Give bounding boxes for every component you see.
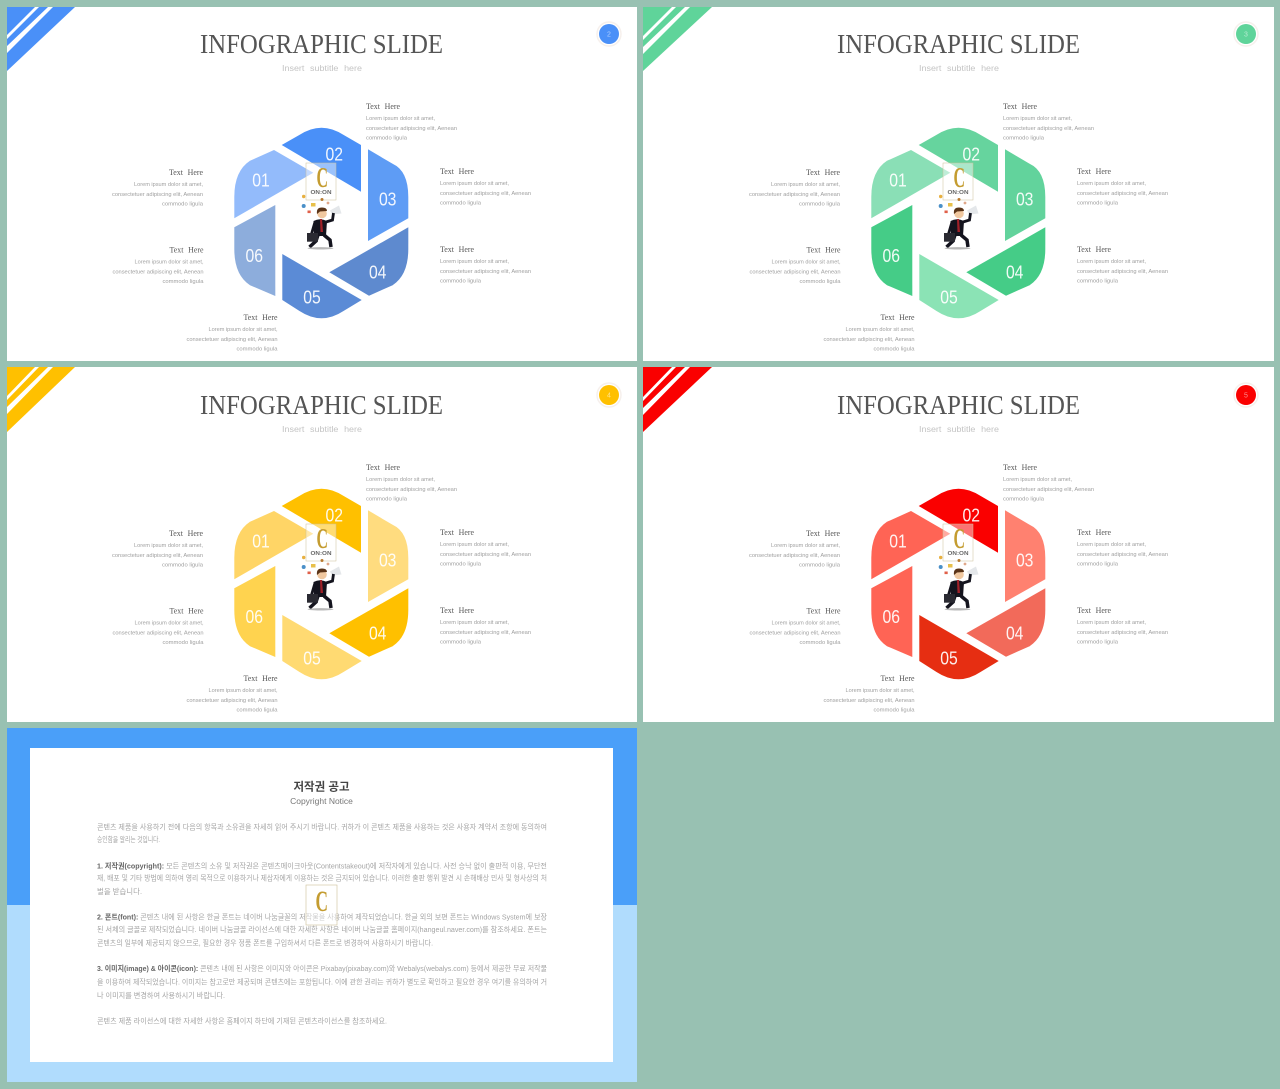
segment 03: 03	[379, 190, 396, 210]
text block bottom: consectetuer adipiscing elit, Aenean	[824, 337, 914, 343]
text block left lower: commodo ligula	[800, 640, 840, 646]
text block top: Text Here	[366, 101, 400, 111]
page badge: 5	[1244, 392, 1248, 400]
text block right upper: Text Here	[1077, 166, 1111, 176]
page badge: 2	[607, 32, 611, 38]
hexagon cycle diagram	[234, 489, 408, 679]
text block bottom: Text Here	[880, 673, 915, 683]
text block top	[1003, 101, 1094, 142]
text block right lower: commodo ligula	[1077, 640, 1118, 646]
text block: clause 3 image and icon: 을 이용하여 제작되었습니다. 이미지는 참고로만 제공되며 콘텐츠에는 포함됩니다. 이에 관한 권리는 귀하가 별도로 확인하고 필요한 경우 여기를 유의하여 거	[97, 976, 547, 986]
hexagon cycle diagram	[234, 128, 408, 318]
segment 01	[234, 150, 313, 218]
text block bottom: commodo ligula	[236, 708, 278, 714]
text block: clause 3 image and icon: 3. 이미지(image) & 아이콘(icon): 콘텐츠 내에 된 사항은 이미지와 아이콘은 Pixabay(pixabay.com)와 Webalys(webalys.com) 등에서 제공한 무료 저작물	[97, 963, 547, 973]
text block right upper: Lorem ipsum dolor sit amet,	[1077, 542, 1147, 548]
text block right upper: commodo ligula	[440, 200, 481, 206]
text block right lower: Lorem ipsum dolor sit amet,	[440, 259, 510, 265]
text block left lower: Lorem ipsum dolor sit amet,	[772, 260, 841, 266]
text block right upper: Text Here	[1077, 527, 1111, 537]
text block right upper: consectetuer adipiscing elit, Aenean	[1077, 552, 1168, 558]
text block right upper	[1077, 527, 1168, 568]
text block right lower: Text Here	[440, 605, 474, 615]
text block left lower: commodo ligula	[162, 279, 204, 285]
title: INFOGRAPHIC SLIDE	[200, 29, 443, 59]
text block bottom: Lorem ipsum dolor sit amet,	[208, 688, 278, 694]
icon: logo and businessman with megaphone: ON:ON	[948, 190, 969, 196]
segment 04: 04	[1006, 262, 1023, 282]
text block right upper: commodo ligula	[440, 562, 481, 568]
text block: clause 1 copyright: 1. 저작권(copyright): 모든 콘텐츠의 소유 및 저작권은 콘텐츠메이크아웃(Contentstakeout)에 저작자에게 있습니다. 사전 승낙 없이 출판적 이용, 무단전	[97, 860, 547, 870]
segment 06	[234, 566, 275, 657]
segment 05: 05	[940, 648, 958, 668]
text block right lower: commodo ligula	[1077, 278, 1118, 284]
text block left upper: consectetuer adipiscing elit, Aenean	[112, 553, 203, 559]
title: INFOGRAPHIC SLIDE	[837, 390, 1080, 420]
segment 01: 01	[889, 531, 907, 551]
segment 01: 01	[252, 531, 270, 551]
segment 05	[282, 254, 362, 318]
segment 01	[871, 150, 950, 218]
icon: logo and businessman with megaphone: C	[954, 163, 965, 194]
icon: watermark logo: C	[316, 885, 328, 918]
text block right upper: consectetuer adipiscing elit, Aenean	[1077, 191, 1168, 197]
text block right lower: consectetuer adipiscing elit, Aenean	[440, 269, 531, 275]
text block bottom: Text Here	[880, 312, 915, 322]
text block: intro: 콘텐츠 제품을 사용하기 전에 다음의 항목과 소유권을 자세히 읽어 주시기 바랍니다. 귀하가 이 콘텐츠 제품을 사용하는 것은 사용자 계약서 조항에 동의하여	[97, 822, 547, 832]
segment 05: 05	[303, 648, 321, 668]
text block left lower: consectetuer adipiscing elit, Aenean	[112, 630, 204, 636]
text block bottom: commodo ligula	[874, 346, 914, 352]
text block right upper: Lorem ipsum dolor sit amet,	[440, 181, 510, 187]
text block left lower: Lorem ipsum dolor sit amet,	[772, 620, 841, 626]
title: INFOGRAPHIC SLIDE	[200, 390, 443, 420]
segment 05	[919, 615, 999, 679]
text block top: Lorem ipsum dolor sit amet,	[1003, 477, 1073, 483]
segment 04	[329, 227, 408, 296]
text block left lower: consectetuer adipiscing elit, Aenean	[750, 270, 840, 276]
text block right lower	[440, 605, 531, 646]
text block left lower: commodo ligula	[162, 640, 204, 646]
subtitle: Insert subtitle here	[282, 63, 362, 73]
segment 06: 06	[246, 246, 263, 266]
text block left lower	[750, 244, 841, 285]
subtitle: Insert subtitle here	[919, 424, 999, 434]
corner ribbon	[7, 7, 75, 71]
subtitle: Insert subtitle here	[282, 424, 362, 434]
segment 05	[919, 254, 999, 318]
text block right lower: Text Here	[440, 244, 474, 254]
text block right upper: commodo ligula	[1077, 562, 1118, 568]
segment 04: 04	[369, 262, 386, 282]
text block: clause 2 font: 콘텐츠의 일부에 제공되지 않으므로, 필요한 경우 정품 폰트를 구입하셔서 다른 폰트로 변경하여 사용하시기 바랍니다.	[97, 938, 433, 948]
text block top: Text Here	[366, 462, 400, 472]
hexagon cycle diagram	[871, 489, 1045, 679]
text block top: Lorem ipsum dolor sit amet,	[366, 477, 436, 483]
text block: intro: 승인함을 알리는 것입니다.	[97, 834, 160, 844]
segment 01	[871, 511, 950, 579]
panel: red infographic slide	[643, 367, 1274, 722]
icon: logo and businessman with megaphone: C	[316, 524, 328, 555]
text block right lower: commodo ligula	[440, 278, 481, 284]
text block top: commodo ligula	[1003, 496, 1044, 502]
text block right upper	[440, 527, 531, 568]
text block left upper: Lorem ipsum dolor sit amet,	[771, 182, 841, 188]
segment 04	[329, 588, 408, 657]
segment 02	[919, 128, 998, 192]
text block: clause 2 font	[97, 912, 547, 948]
text block top: commodo ligula	[366, 496, 407, 502]
corner ribbon	[643, 367, 712, 432]
icon: logo and businessman with megaphone: C	[316, 163, 328, 194]
text block: clause 3 image and icon: 나 이미지를 변경하여 사용하시기 바랍니다.	[97, 990, 225, 1000]
text block bottom	[186, 673, 278, 714]
text block: clause 1 copyright: 재, 배포 및 기타 방법에 의하여 영리 목적으로 이용하거나 제삼자에게 이용하는 것은 금지되어 있습니다. 이러한 출판 행위 발견 시 손해배상 민사 및 형사상의 처	[97, 872, 547, 882]
text block left upper: Text Here	[169, 528, 203, 538]
panel: green infographic slide	[643, 7, 1274, 361]
text block top	[1003, 462, 1094, 502]
text block left upper: consectetuer adipiscing elit, Aenean	[749, 192, 840, 198]
text block left upper: commodo ligula	[162, 202, 203, 208]
segment 02	[282, 128, 361, 192]
page badge	[597, 22, 621, 46]
text block right lower: commodo ligula	[440, 640, 481, 646]
text block top: commodo ligula	[1003, 136, 1044, 142]
text block right upper: Text Here	[440, 166, 474, 176]
text block left lower: Lorem ipsum dolor sit amet,	[134, 260, 204, 266]
segment 03	[368, 510, 408, 602]
segment 02: 02	[963, 505, 980, 525]
text block left lower: Lorem ipsum dolor sit amet,	[134, 620, 204, 626]
text block right upper: consectetuer adipiscing elit, Aenean	[440, 191, 531, 197]
text block left upper	[749, 167, 841, 208]
text block right lower: consectetuer adipiscing elit, Aenean	[440, 630, 531, 636]
text block right upper	[1077, 166, 1168, 206]
title: INFOGRAPHIC SLIDE	[837, 29, 1080, 59]
text block left lower: commodo ligula	[800, 279, 840, 285]
segment 06	[871, 205, 912, 296]
segment 05: 05	[303, 288, 321, 308]
text block: intro	[97, 822, 547, 844]
text block left upper: Text Here	[806, 528, 840, 538]
text block top: Lorem ipsum dolor sit amet,	[1003, 116, 1073, 122]
text block right lower: Lorem ipsum dolor sit amet,	[1077, 620, 1147, 626]
text block bottom: Text Here	[244, 673, 278, 683]
corner ribbon	[7, 367, 75, 432]
segment 03	[1005, 149, 1045, 241]
text block left upper: Text Here	[806, 167, 840, 177]
segment 03: 03	[1016, 190, 1033, 210]
text block bottom: commodo ligula	[874, 708, 914, 714]
text block left lower: Text Here	[170, 244, 204, 254]
page badge	[1234, 22, 1258, 46]
text block top: Text Here	[1003, 462, 1037, 472]
subheading: Copyright Notice	[290, 796, 353, 806]
icon: logo and businessman with megaphone: ON:ON	[310, 190, 332, 196]
text block left upper	[112, 167, 204, 208]
text block left upper: commodo ligula	[799, 562, 840, 568]
segment 06: 06	[883, 246, 900, 266]
text block bottom: consectetuer adipiscing elit, Aenean	[186, 337, 278, 343]
text block: clause 2 font: 된 서체의 글꼴로 제작되었습니다. 네이버 나눔글꼴 라이선스에 대한 자세한 사항은 네이버 나눔글꼴 홈페이지(hangeul.naver.com)를 참조하세요. 폰트는	[97, 924, 547, 934]
icon: logo and businessman with megaphone	[302, 163, 342, 250]
text block right lower	[1077, 244, 1168, 284]
segment 01: 01	[889, 170, 907, 190]
hexagon cycle diagram	[871, 128, 1045, 318]
segment 04	[966, 227, 1045, 296]
segment 05	[282, 615, 362, 679]
text block left lower: Text Here	[806, 606, 841, 616]
text block right lower: Lorem ipsum dolor sit amet,	[440, 620, 510, 626]
text block top: consectetuer adipiscing elit, Aenean	[366, 487, 457, 493]
segment 06: 06	[246, 607, 263, 627]
segment 02	[282, 489, 361, 553]
text block right lower: consectetuer adipiscing elit, Aenean	[1077, 269, 1168, 275]
icon: logo and businessman with megaphone	[302, 524, 342, 610]
text block left lower: consectetuer adipiscing elit, Aenean	[750, 630, 840, 636]
page badge: 3	[1244, 32, 1248, 38]
icon: watermark logo	[306, 885, 337, 925]
text block bottom	[186, 312, 278, 352]
text block right upper: Lorem ipsum dolor sit amet,	[440, 542, 510, 548]
segment 03	[368, 149, 408, 241]
segment 03: 03	[1016, 550, 1033, 570]
panel: yellow infographic slide	[7, 367, 637, 722]
text block left upper: Lorem ipsum dolor sit amet,	[771, 543, 841, 549]
segment 02: 02	[326, 144, 343, 164]
text block top	[366, 462, 457, 502]
page badge	[1234, 383, 1258, 407]
text block left lower: consectetuer adipiscing elit, Aenean	[112, 270, 204, 276]
segment 03	[1005, 510, 1045, 602]
panel: copyright notice	[7, 728, 637, 1082]
text block right upper: Text Here	[440, 527, 474, 537]
text block bottom	[824, 673, 915, 714]
panel: blue infographic slide	[7, 7, 637, 361]
text block top: Text Here	[1003, 101, 1037, 111]
segment 03: 03	[379, 550, 396, 570]
segment 06	[871, 566, 912, 657]
icon: logo and businessman with megaphone	[939, 524, 978, 610]
segment 02	[919, 489, 998, 553]
text block right lower: Text Here	[1077, 244, 1111, 254]
text block left upper: Lorem ipsum dolor sit amet,	[134, 182, 204, 188]
text block top: consectetuer adipiscing elit, Aenean	[366, 126, 457, 132]
text block top: commodo ligula	[366, 136, 407, 142]
text block bottom: Text Here	[244, 312, 278, 322]
segment 02: 02	[326, 505, 343, 525]
text block right lower: Lorem ipsum dolor sit amet,	[1077, 259, 1147, 265]
segment 04: 04	[369, 623, 386, 643]
subtitle: Insert subtitle here	[919, 63, 999, 73]
text block bottom: consectetuer adipiscing elit, Aenean	[186, 698, 278, 704]
text block right lower: consectetuer adipiscing elit, Aenean	[1077, 630, 1168, 636]
text block right upper: consectetuer adipiscing elit, Aenean	[440, 552, 531, 558]
text block bottom: consectetuer adipiscing elit, Aenean	[824, 698, 914, 704]
segment 05: 05	[940, 288, 958, 308]
text block left lower	[750, 606, 841, 646]
segment 01: 01	[252, 170, 270, 190]
icon: logo and businessman with megaphone: ON:ON	[310, 551, 332, 557]
text block right lower: Text Here	[1077, 605, 1111, 615]
text block bottom: commodo ligula	[236, 346, 278, 352]
segment 01	[234, 511, 313, 579]
text block bottom: Lorem ipsum dolor sit amet,	[846, 688, 915, 694]
corner ribbon	[643, 7, 712, 71]
text block left lower: Text Here	[806, 244, 841, 254]
text block right upper: commodo ligula	[1077, 200, 1118, 206]
text block right upper: Lorem ipsum dolor sit amet,	[1077, 181, 1147, 187]
text block: clause 1 copyright	[97, 860, 547, 896]
text block left lower: Text Here	[170, 606, 204, 616]
text block bottom	[824, 312, 915, 352]
text block: clause 2 font: 2. 폰트(font): 콘텐츠 내에 된 사항은 한글 폰트는 네이버 나눔글꼴의 저작물을 사용하여 제작되었습니다. 한글 외의 보편 폰트는 Windows System에 보장	[97, 912, 547, 922]
icon: logo and businessman with megaphone: C	[954, 524, 965, 555]
text block right lower	[1077, 605, 1168, 646]
text block left lower	[112, 606, 204, 646]
segment 06	[234, 205, 275, 296]
text block top: consectetuer adipiscing elit, Aenean	[1003, 126, 1094, 132]
text block left upper: consectetuer adipiscing elit, Aenean	[749, 553, 840, 559]
text block bottom: Lorem ipsum dolor sit amet,	[846, 327, 915, 333]
text block right lower	[440, 244, 531, 284]
text block left upper: Lorem ipsum dolor sit amet,	[134, 543, 204, 549]
icon: logo and businessman with megaphone: ON:ON	[948, 551, 969, 557]
heading: copyright notice: 저작권 공고	[293, 780, 350, 794]
segment 02: 02	[963, 144, 980, 164]
text block left upper: consectetuer adipiscing elit, Aenean	[112, 192, 203, 198]
text block left lower	[112, 244, 204, 285]
segment 04: 04	[1006, 623, 1023, 643]
text block: clause 1 copyright: 벌을 받습니다.	[97, 886, 142, 896]
text block right upper	[440, 166, 531, 206]
text block bottom: Lorem ipsum dolor sit amet,	[208, 327, 278, 333]
text block left upper: Text Here	[169, 167, 203, 177]
text block left upper: commodo ligula	[799, 202, 840, 208]
text block top	[366, 101, 457, 142]
text block left upper	[112, 528, 204, 568]
text block top: consectetuer adipiscing elit, Aenean	[1003, 487, 1094, 493]
page badge	[597, 383, 621, 407]
text block top: Lorem ipsum dolor sit amet,	[366, 116, 436, 122]
text block: license note: 콘텐츠 제품 라이선스에 대한 자세한 사항은 홈페이지 하단에 기재된 콘텐츠라이선스를 참조하세요.	[97, 1016, 387, 1026]
segment 04	[966, 588, 1045, 657]
text block left upper: commodo ligula	[162, 562, 203, 568]
text block left upper	[749, 528, 841, 568]
icon: logo and businessman with megaphone	[939, 163, 978, 250]
segment 06: 06	[883, 607, 900, 627]
page badge: 4	[607, 392, 611, 400]
text block: clause 3 image and icon	[97, 963, 547, 1000]
